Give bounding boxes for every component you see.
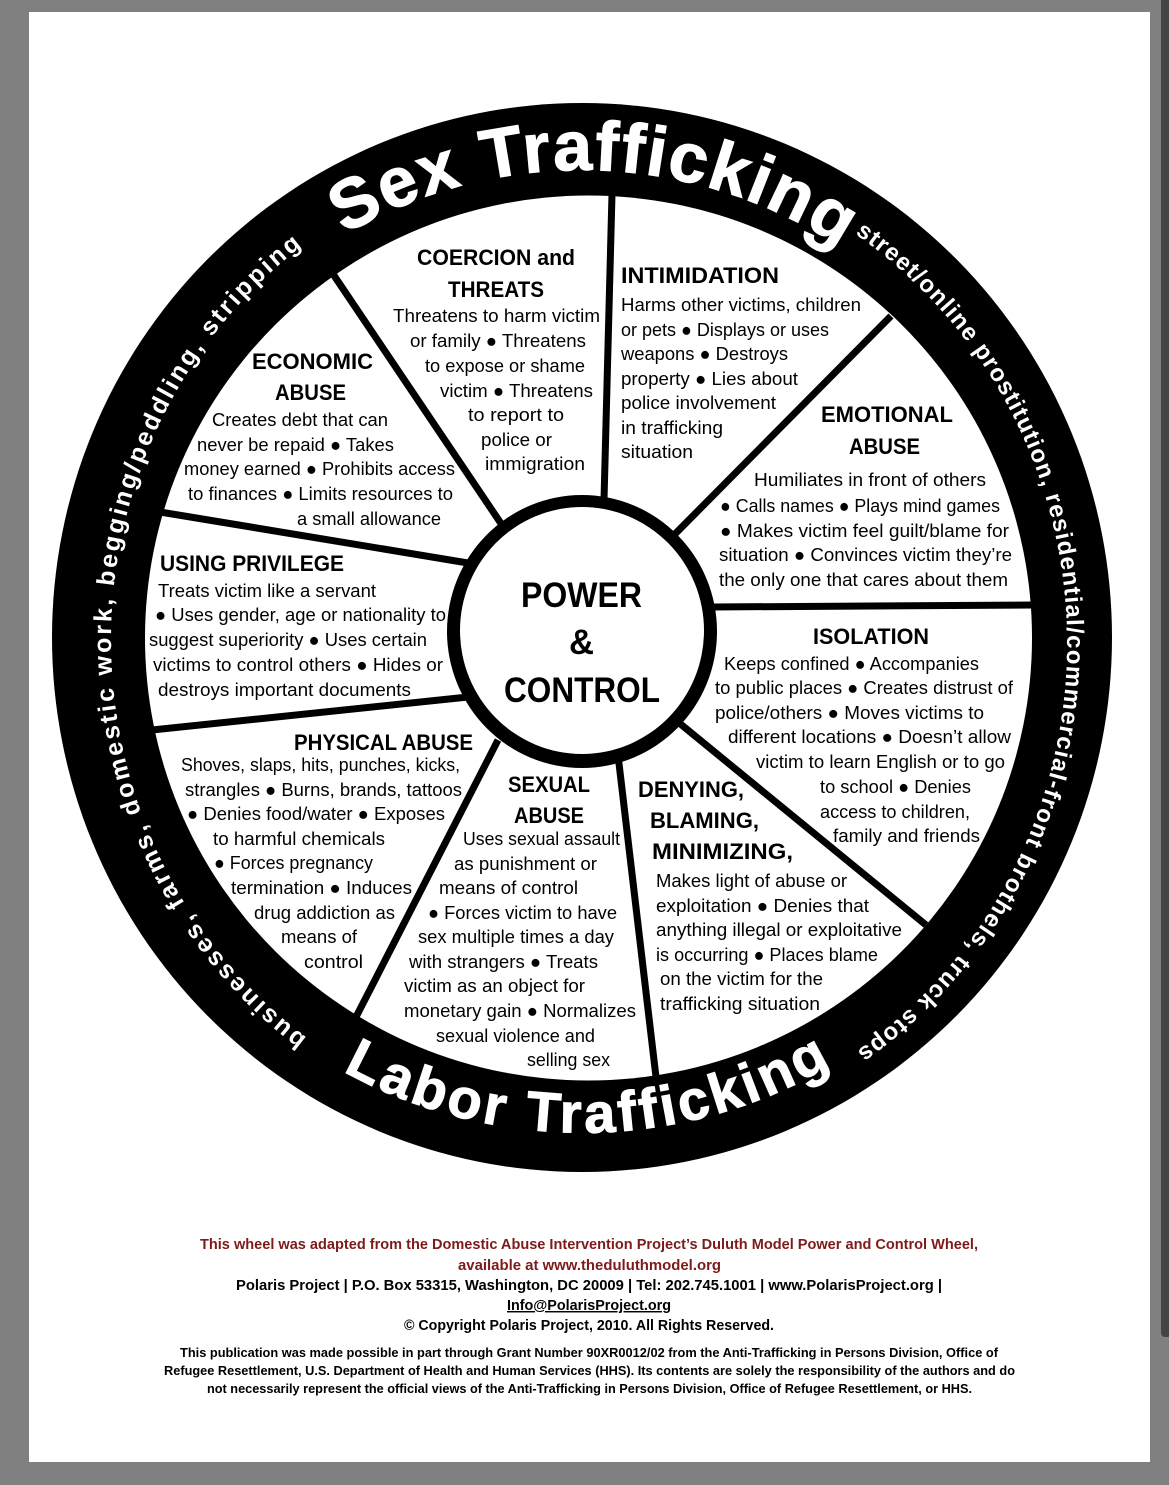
contact information: Polaris Project | P.O. Box 53315, Washington, DC 20009 | Tel: 202.745.1001 | www.PolarisProject.org | <box>236 1278 942 1294</box>
body text: victim as an object for <box>404 975 585 996</box>
body text <box>656 870 902 1014</box>
body text: sexual violence and <box>436 1025 595 1046</box>
body text: police/others ● Moves victims to <box>715 702 984 723</box>
body text: the only one that cares about them <box>719 569 1008 590</box>
heading: ISOLATION <box>813 624 929 649</box>
body text: a small allowance <box>297 508 441 529</box>
grant disclaimer: not necessarily represent the official views of the Anti-Trafficking in Persons Division, Office of Refugee Resettlement, or HHS. <box>207 1381 972 1396</box>
body text: to finances ● Limits resources to <box>188 483 453 504</box>
heading: THREATS <box>448 277 544 302</box>
body text <box>149 580 446 700</box>
body text: situation <box>621 441 693 462</box>
body text: money earned ● Prohibits access <box>184 458 455 479</box>
body text: ● Forces pregnancy <box>214 852 374 873</box>
body text: control <box>304 951 363 972</box>
panel: isolation <box>715 624 1014 846</box>
heading <box>252 349 373 405</box>
body text: family and friends <box>833 825 980 846</box>
body text: on the victim for the <box>660 968 823 989</box>
body text: access to children, <box>820 801 970 822</box>
heading: MINIMIZING, <box>652 839 793 864</box>
panel: emotional abuse <box>719 402 1012 590</box>
body text: property ● Lies about <box>621 368 798 389</box>
body text: ● Makes victim feel guilt/blame for <box>720 520 1009 541</box>
body text: Makes light of abuse or <box>656 870 847 891</box>
adaptation note: available at www.theduluthmodel.org <box>458 1258 721 1274</box>
body text: in trafficking <box>621 417 723 438</box>
hub title: & <box>569 623 594 662</box>
body text: or pets ● Displays or uses <box>621 319 829 340</box>
body text <box>404 828 636 1070</box>
heading: ABUSE <box>849 434 920 459</box>
contact information <box>236 1278 942 1334</box>
grant disclaimer: This publication was made possible in part through Grant Number 90XR0012/02 from the Anti-Trafficking in Persons Division, Office of <box>180 1345 999 1360</box>
body text: Harms other victims, children <box>621 294 861 315</box>
body text: monetary gain ● Normalizes <box>404 1000 636 1021</box>
body text <box>719 469 1012 590</box>
heading <box>417 245 575 302</box>
grant disclaimer <box>164 1345 1015 1396</box>
heading: PHYSICAL ABUSE <box>294 730 473 755</box>
body text: to report to <box>468 404 564 425</box>
body text: termination ● Induces <box>231 877 412 898</box>
body text: with strangers ● Treats <box>408 951 598 972</box>
rim text: labor trafficking venues: businesses, farms, domestic work, begging/peddling, stripping <box>93 236 306 1052</box>
body text: victims to control others ● Hides or <box>153 654 443 675</box>
scrollbar <box>1161 0 1169 1337</box>
body text: situation ● Convinces victim they’re <box>719 544 1012 565</box>
body text <box>181 754 462 972</box>
rim title: Sex Trafficking: Sex Trafficking <box>330 120 856 252</box>
body text: as punishment or <box>454 853 597 874</box>
body text: to public places ● Creates distrust of <box>715 677 1014 698</box>
body text: Uses sexual assault <box>463 828 620 849</box>
body text: ● Denies food/water ● Exposes <box>187 803 445 824</box>
body text <box>184 409 455 529</box>
footer credits <box>164 1237 1015 1396</box>
body text: drug addiction as <box>254 902 395 923</box>
body text: or family ● Threatens <box>410 330 586 351</box>
heading: ABUSE <box>514 803 584 828</box>
body text: Threatens to harm victim <box>393 305 600 326</box>
body text: to school ● Denies <box>820 776 971 797</box>
contact information: © Copyright Polaris Project, 2010. All Rights Reserved. <box>404 1318 774 1334</box>
heading: SEXUAL <box>508 772 590 797</box>
panel: denying, blaming, minimizing <box>638 777 902 1014</box>
panel: intimidation <box>620 263 861 462</box>
body text: police or <box>481 429 552 450</box>
body text: trafficking situation <box>660 993 820 1014</box>
wheel <box>52 103 1112 1172</box>
body text <box>620 294 861 462</box>
heading: INTIMIDATION <box>621 263 779 288</box>
rim text: sex trafficking venues: street/online prostitution, residential/commercial-front brothels, truck stops <box>857 226 1084 1060</box>
body text: anything illegal or exploitative <box>656 919 902 940</box>
body text: Treats victim like a servant <box>158 580 376 601</box>
rim title: Labor Trafficking: Labor Trafficking <box>345 1038 830 1134</box>
hub title: CONTROL <box>504 671 660 710</box>
heading <box>821 402 953 459</box>
hub <box>447 495 717 768</box>
body text: to harmful chemicals <box>213 828 385 849</box>
body text: destroys important documents <box>158 679 411 700</box>
body text: is occurring ● Places blame <box>656 944 878 965</box>
body text: ● Uses gender, age or nationality to <box>155 604 446 625</box>
body text: weapons ● Destroys <box>620 343 788 364</box>
adaptation note: This wheel was adapted from the Domestic Abuse Intervention Project’s Duluth Model Power and Control Wheel, <box>200 1237 978 1253</box>
spokes <box>152 194 1033 1077</box>
body text: strangles ● Burns, brands, tattoos <box>185 779 462 800</box>
heading: DENYING, <box>638 777 744 802</box>
body text: Humiliates in front of others <box>754 469 986 490</box>
heading: ABUSE <box>275 380 346 405</box>
heading: BLAMING, <box>650 808 759 833</box>
body text: selling sex <box>527 1049 611 1070</box>
body text: ● Forces victim to have <box>428 902 617 923</box>
body text: means of <box>281 926 358 947</box>
body text: police involvement <box>621 392 776 413</box>
body text: Creates debt that can <box>212 409 388 430</box>
body text: suggest superiority ● Uses certain <box>149 629 427 650</box>
grant disclaimer: Refugee Resettlement, U.S. Department of Health and Human Services (HHS). Its contents are solely the responsibility of the authors and do <box>164 1363 1015 1378</box>
body text: Keeps confined ● Accompanies <box>724 653 979 674</box>
heading <box>638 777 793 864</box>
body text: exploitation ● Denies that <box>656 895 869 916</box>
contact information: Info@PolarisProject.org <box>507 1298 671 1314</box>
body text: means of control <box>439 877 578 898</box>
body text: sex multiple times a day <box>418 926 615 947</box>
hub title <box>504 576 660 710</box>
panel: economic abuse <box>184 349 455 529</box>
inner white field <box>145 196 1032 1080</box>
heading: COERCION and <box>417 245 575 270</box>
heading: EMOTIONAL <box>821 402 953 427</box>
heading: ECONOMIC <box>252 349 373 374</box>
heading <box>508 772 590 828</box>
body text: never be repaid ● Takes <box>197 434 394 455</box>
body text: victim to learn English or to go <box>756 751 1005 772</box>
body text: different locations ● Doesn’t allow <box>728 726 1012 747</box>
panel: using privilege <box>149 551 446 700</box>
body text <box>715 653 1014 846</box>
hub title: POWER <box>521 576 642 615</box>
panel: physical abuse <box>181 730 473 972</box>
body text: to expose or shame <box>425 355 585 376</box>
outer black rim <box>52 103 1112 1172</box>
body text: victim ● Threatens <box>440 380 593 401</box>
panel: sexual abuse <box>404 772 636 1070</box>
adaptation note <box>200 1237 978 1274</box>
body text: Shoves, slaps, hits, punches, kicks, <box>181 754 460 775</box>
panel: coercion and threats <box>393 245 600 474</box>
heading: USING PRIVILEGE <box>160 551 344 576</box>
body text: immigration <box>485 453 585 474</box>
body text: ● Calls names ● Plays mind games <box>720 495 1000 516</box>
body text <box>393 305 600 474</box>
